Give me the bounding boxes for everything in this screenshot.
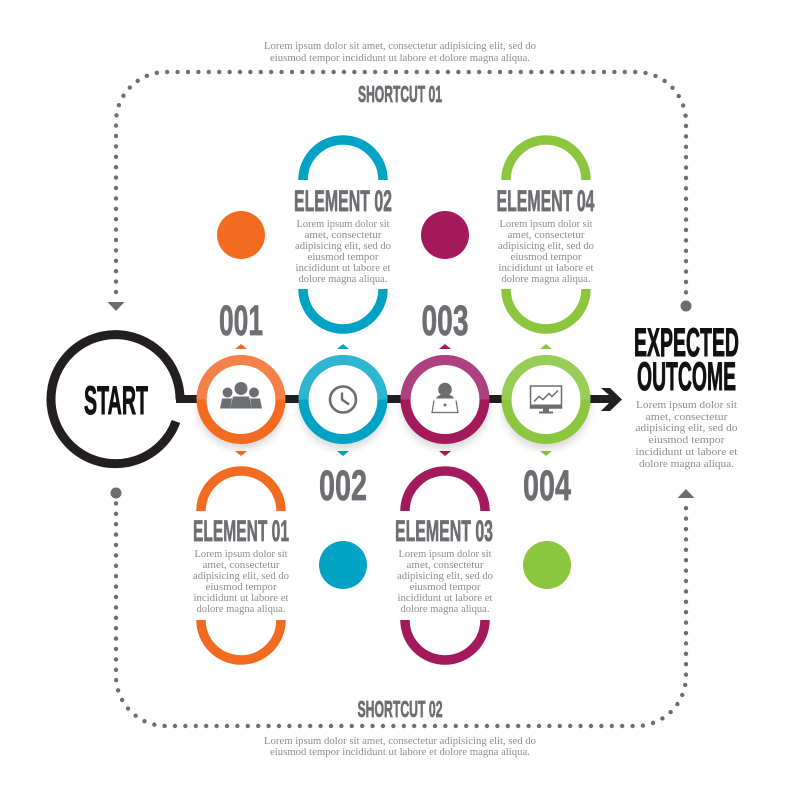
shortcut 02 arrowhead xyxy=(678,489,694,498)
bottom arc xyxy=(405,620,485,660)
description xyxy=(636,400,738,470)
number 004: 004 xyxy=(523,462,571,510)
shortcut 01 description: Lorem ipsum dolor sit amet, consectetur adipisicing elit, sed do xyxy=(264,41,536,52)
number 003: 003 xyxy=(422,297,468,345)
down pointer xyxy=(235,451,247,456)
description xyxy=(397,549,493,615)
heading: ELEMENT 01 xyxy=(193,515,289,548)
description: dolore magna aliqua. xyxy=(298,274,388,285)
up pointer xyxy=(337,344,349,349)
green dot xyxy=(523,541,571,589)
orange ring with people icon xyxy=(197,360,285,450)
purple dot xyxy=(421,211,469,259)
green ring with monitor chart icon xyxy=(502,360,590,450)
heading: ELEMENT 03 xyxy=(395,515,493,548)
description: incididunt ut labore et xyxy=(398,593,493,604)
shortcut 01 description: eiusmod tempor incididunt ut labore et dolore magna aliqua. xyxy=(270,53,530,64)
description: Lorem ipsum dolor sit xyxy=(296,219,390,230)
shortcut 02 start dot xyxy=(110,488,122,498)
step 003 purple xyxy=(401,211,489,456)
shortcut 01 arrowhead xyxy=(108,302,124,311)
heading: shortcut 01: SHORTCUT 01 xyxy=(358,81,442,107)
heading: ELEMENT 02 xyxy=(294,185,392,218)
step 002 blue xyxy=(299,344,387,589)
description: Lorem ipsum dolor sit xyxy=(398,549,492,560)
description: dolore magna aliqua. xyxy=(639,459,734,470)
bottom arc xyxy=(303,289,383,329)
description: Lorem ipsum dolor sit xyxy=(636,400,737,411)
description xyxy=(193,549,289,615)
blue ring with clock icon xyxy=(299,360,387,450)
description: adipisicing elit, sed do xyxy=(193,571,289,582)
description: amet, consectetur xyxy=(304,230,382,241)
description: amet, consectetur xyxy=(202,560,280,571)
description xyxy=(295,219,391,285)
description: eiusmod tempor xyxy=(648,435,725,446)
description: dolore magna aliqua. xyxy=(502,274,590,285)
description xyxy=(498,219,594,285)
blue dot xyxy=(319,541,367,589)
top arc xyxy=(303,140,383,180)
description: Lorem ipsum dolor sit xyxy=(500,219,593,230)
down pointer xyxy=(337,451,349,456)
description: adipisicing elit, sed do xyxy=(397,571,493,582)
top arc xyxy=(506,140,586,180)
top arc xyxy=(201,471,281,511)
number 002: 002 xyxy=(319,462,367,510)
description: Lorem ipsum dolor sit xyxy=(194,549,288,560)
description: eiusmod tempor xyxy=(206,582,277,593)
number 001: 001 xyxy=(219,297,263,345)
element 03 block xyxy=(395,471,493,660)
down pointer xyxy=(439,451,451,456)
heading: shortcut 02: SHORTCUT 02 xyxy=(358,696,442,722)
orange dot xyxy=(217,211,265,259)
shortcut 01 description xyxy=(264,41,536,64)
down pointer xyxy=(540,451,552,456)
element 04 block xyxy=(496,140,595,329)
shortcut 02 description: eiusmod tempor incididunt ut labore et dolore magna aliqua. xyxy=(270,747,530,758)
description: incididunt ut labore et xyxy=(498,263,594,274)
up pointer xyxy=(235,344,247,349)
step 004 green xyxy=(502,344,590,589)
purple ring with laptop user icon xyxy=(401,360,489,450)
top arc xyxy=(405,471,485,511)
start node: START xyxy=(84,379,148,423)
up pointer xyxy=(439,344,451,349)
element 01 block xyxy=(193,471,289,660)
element 02 block xyxy=(294,140,392,329)
shortcut 02 description xyxy=(264,736,536,758)
description: dolore magna aliqua. xyxy=(400,604,490,615)
description: incididunt ut labore et xyxy=(194,593,289,604)
description: incididunt ut labore et xyxy=(296,263,391,274)
heading: ELEMENT 04 xyxy=(496,185,595,218)
shortcut 02 description: Lorem ipsum dolor sit amet, consectetur adipisicing elit, sed do xyxy=(264,736,536,747)
description: eiusmod tempor xyxy=(510,252,582,263)
description: adipisicing elit, sed do xyxy=(295,241,391,252)
description: eiusmod tempor xyxy=(308,252,379,263)
shortcut 01 dotted path xyxy=(116,72,686,306)
description: amet, consectetur xyxy=(646,412,728,423)
description: eiusmod tempor xyxy=(410,582,481,593)
description: incididunt ut labore et xyxy=(636,447,738,458)
up pointer xyxy=(540,344,552,349)
step 001 orange xyxy=(197,211,285,456)
start node xyxy=(51,335,180,464)
shortcut 02 dotted path xyxy=(116,493,686,726)
heading xyxy=(634,321,739,399)
description: adipisicing elit, sed do xyxy=(498,241,594,252)
description: amet, consectetur xyxy=(406,560,484,571)
description: adipisicing elit, sed do xyxy=(636,423,738,434)
description: amet, consectetur xyxy=(508,230,585,241)
timeline arrow xyxy=(176,388,622,411)
bottom arc xyxy=(506,289,586,329)
description: dolore magna aliqua. xyxy=(196,604,286,615)
shortcut 01 end dot xyxy=(680,300,692,312)
expected outcome block xyxy=(634,321,739,470)
bottom arc xyxy=(201,620,281,660)
